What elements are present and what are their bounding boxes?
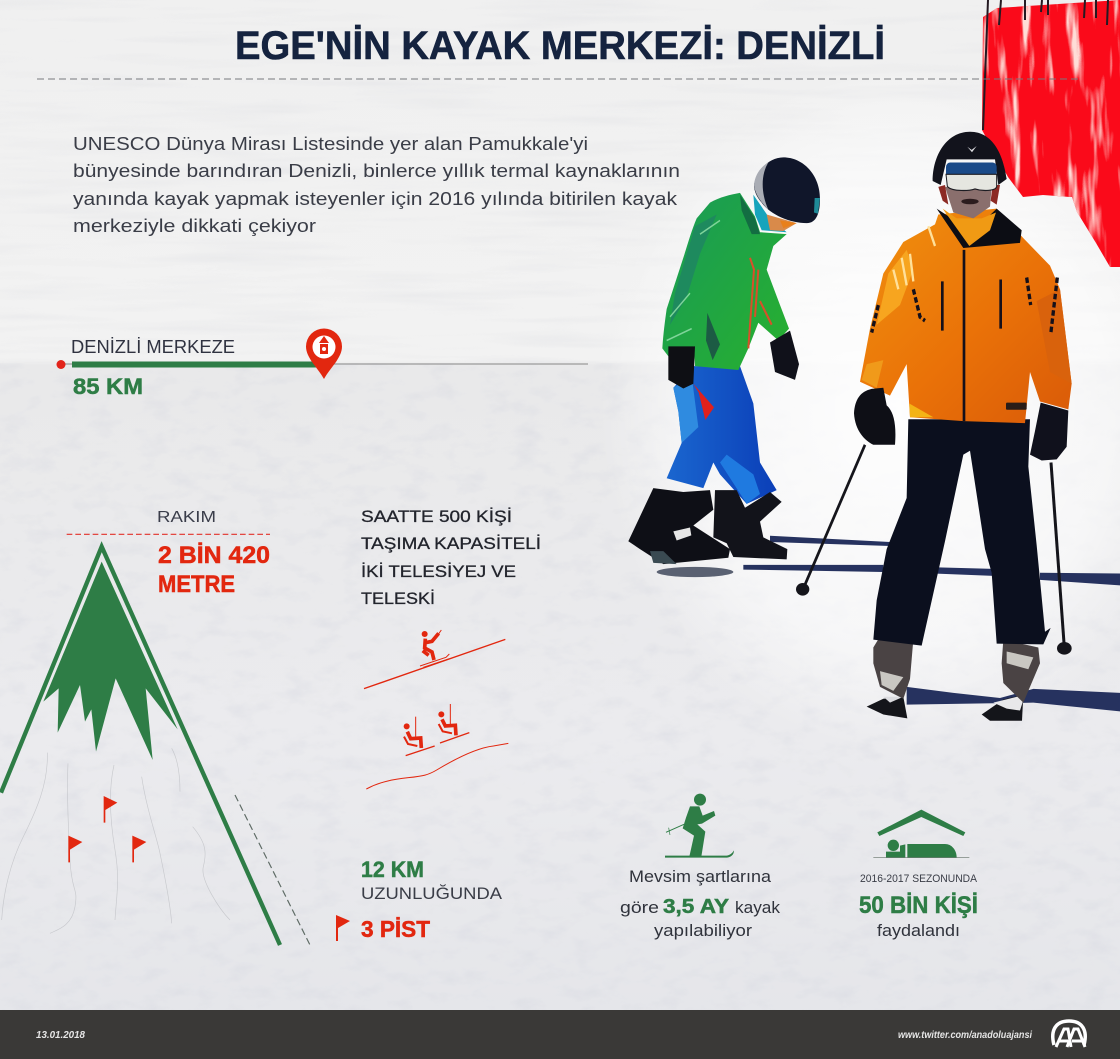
visitors text: 50 BİN KİŞİ — [859, 892, 978, 919]
distance to Denizli centre: 85 KM — [73, 374, 143, 399]
visitors text: 2016-2017 SEZONUNDA — [860, 873, 978, 885]
intro text: bünyesinde barındıran Denizli, binlerce yıllık termal kaynaklarının — [73, 161, 680, 181]
snow cap shape — [43, 562, 178, 760]
icon: flag — [336, 915, 350, 941]
skiing season text: kayak — [735, 898, 780, 917]
boy helmet — [754, 157, 820, 223]
boy boots — [628, 488, 730, 564]
boy neck and face — [753, 195, 787, 232]
icon: shelter with sleeping person — [873, 810, 969, 858]
skiing season text — [620, 867, 780, 940]
boy jacket — [662, 193, 789, 370]
skiing season text: yapılabiliyor — [654, 921, 752, 940]
icons: ski lifts — [364, 630, 508, 789]
altitude text: METRE — [158, 571, 235, 598]
man gloves — [854, 388, 895, 445]
twitter address: www.twitter.com/anadoluajansi — [898, 1029, 1033, 1041]
ski tracks — [2, 748, 230, 933]
man goggles — [946, 163, 997, 178]
intro text: merkeziyle dikkati çekiyor — [73, 216, 316, 236]
pist information: UZUNLUĞUNDA — [361, 884, 503, 903]
lift capacity text: TELESKİ — [361, 589, 435, 608]
man face — [945, 187, 992, 218]
lift capacity text: SAATTE 500 KİŞİ — [361, 507, 512, 526]
man pole right — [1051, 463, 1064, 648]
man pants — [873, 419, 1051, 646]
lift capacity text: İKİ TELESİYEJ VE — [361, 562, 516, 581]
distance to Denizli centre — [56, 328, 588, 399]
lift capacity text: TAŞIMA KAPASİTELİ — [361, 534, 541, 553]
mountain illustration — [1, 534, 310, 945]
slope dashed line — [235, 795, 310, 945]
visitors text: faydalandı — [877, 921, 960, 940]
man skier — [796, 132, 1072, 721]
altitude text — [157, 509, 270, 598]
skiing season text: 3,5 AY — [663, 896, 730, 918]
pist information — [336, 857, 503, 942]
man jacket — [860, 209, 1072, 423]
title: EGE'NİN KAYAK MERKEZİ: DENİZLİ — [235, 24, 885, 68]
man boots and skis — [867, 697, 907, 718]
altitude dashed line — [67, 533, 270, 536]
icon: skier — [665, 794, 734, 858]
footer bar — [0, 1010, 1120, 1059]
skiers illustration — [628, 132, 1120, 721]
icon: chairlift — [366, 704, 508, 789]
red safety net — [975, 0, 1120, 270]
lift capacity text — [361, 507, 541, 608]
distance to Denizli centre: DENİZLİ MERKEZE — [71, 337, 235, 357]
altitude text: 2 BİN 420 — [158, 542, 270, 569]
pist information: 12 KM — [361, 857, 424, 882]
altitude text: RAKIM — [157, 509, 216, 526]
skiing season text: göre — [620, 898, 659, 917]
date: 13.01.2018 — [36, 1030, 85, 1041]
logo: AA — [1053, 1021, 1085, 1047]
mountain outline — [1, 547, 280, 945]
intro text: UNESCO Dünya Mirası Listesinde yer alan Pamukkale'yi — [73, 134, 588, 154]
skiing season text: Mevsim şartlarına — [629, 867, 772, 886]
visitors text — [859, 873, 978, 940]
intro text: yanında kayak yapmak isteyenler için 2016 yılında bitirilen kayak — [73, 189, 678, 209]
boy skier — [628, 157, 820, 564]
boy pants — [667, 366, 777, 504]
pist information: 3 PİST — [361, 916, 430, 942]
icon: teleski — [364, 630, 505, 689]
man pole left — [803, 445, 865, 589]
flags — [68, 796, 146, 862]
icon: location pin with clock tower — [306, 328, 342, 379]
man collar — [937, 209, 1022, 248]
man helmet — [933, 132, 1007, 185]
boy gloves — [668, 346, 695, 389]
intro text — [73, 134, 680, 236]
ski shadows — [657, 536, 1120, 711]
